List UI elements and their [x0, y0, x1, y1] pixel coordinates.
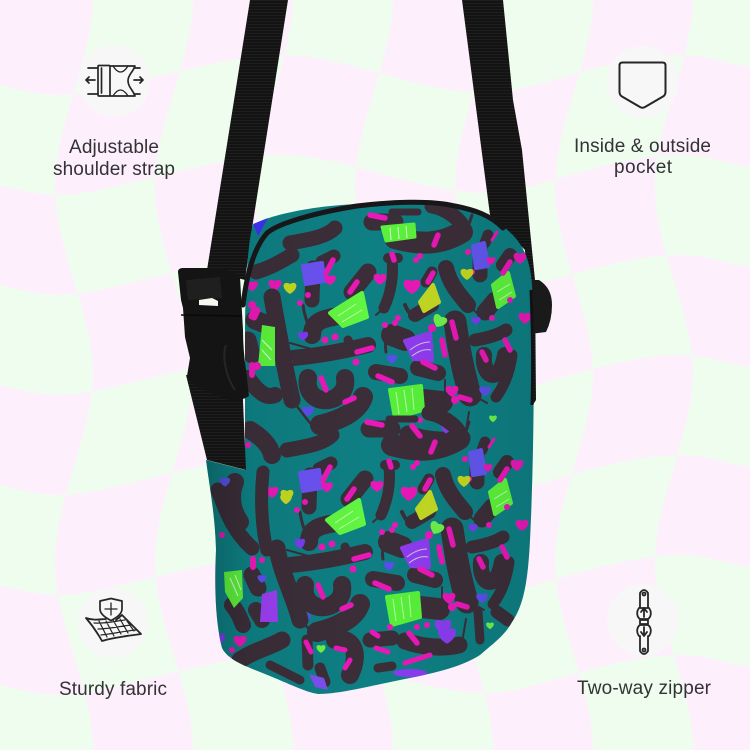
bag body with dachshund print [206, 195, 536, 700]
label: adjustable shoulder strap: shoulder strap [53, 159, 175, 180]
label: inside and outside pocket: Inside & outside [574, 136, 711, 157]
buckle notch [199, 298, 218, 306]
blue lining peek at top left corner [253, 218, 268, 236]
label: two-way zipper: Two-way zipper [577, 678, 712, 699]
dachshund print [206, 195, 536, 700]
top sweater on the upper dog [382, 224, 415, 241]
left shoulder strap, upper section [207, 0, 288, 280]
left panel dogs and sweaters [211, 255, 310, 680]
top zipper [243, 202, 503, 305]
label: inside and outside pocket: pocket [614, 157, 673, 178]
feature: two-way zipper [577, 584, 712, 699]
icon: shield over fabric [78, 588, 148, 658]
icon: buckle with arrows [78, 45, 150, 117]
label: adjustable shoulder strap: Adjustable [69, 137, 159, 158]
icon: double zipper pulls [607, 584, 679, 656]
bottom row dogs [306, 612, 508, 690]
icon: pocket [606, 46, 678, 118]
side release buckle [178, 268, 249, 400]
left shoulder strap, lower section [186, 375, 246, 470]
right bag edge shadow [531, 290, 533, 405]
feature: inside and outside pocket [574, 46, 711, 178]
right side strap loop [530, 280, 552, 334]
fabric shading [206, 230, 534, 667]
feature: adjustable shoulder strap [53, 45, 175, 180]
right shoulder strap [462, 0, 536, 408]
label: sturdy fabric: Sturdy fabric [59, 679, 167, 700]
feature: sturdy fabric [59, 588, 167, 700]
